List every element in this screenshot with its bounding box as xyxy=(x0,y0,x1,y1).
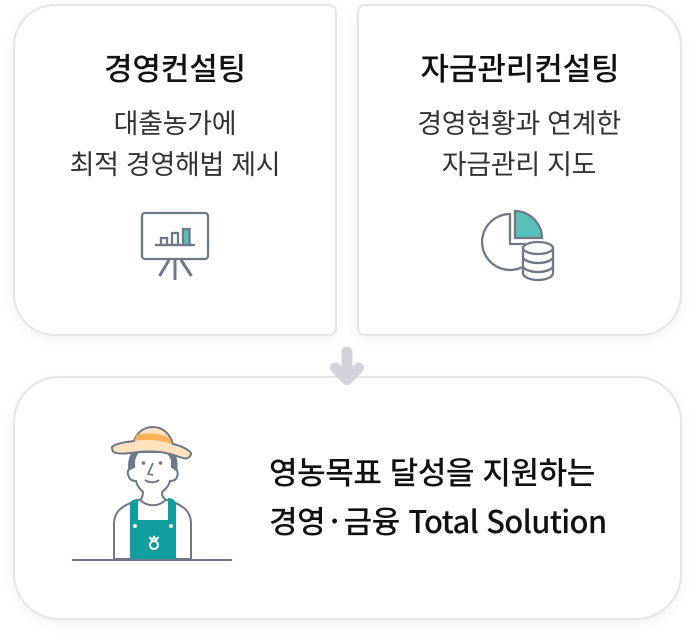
panel: fund management consulting xyxy=(357,4,682,336)
text: fund management description: 자금관리 지도 xyxy=(442,150,596,180)
text: total solution message: 경영 · 금융 Total Solution xyxy=(269,497,607,542)
panel: management consulting xyxy=(13,4,337,336)
panel: total solution xyxy=(13,376,682,620)
text: fund management description xyxy=(417,109,621,180)
neck and face xyxy=(128,452,178,505)
text: total solution message: 영농목표 달성을 지원하는 xyxy=(269,448,595,493)
heading: fund management consulting: 자금관리컨설팅 xyxy=(421,52,619,87)
overalls logo xyxy=(150,537,158,549)
heading: management consulting: 경영컨설팅 xyxy=(104,52,246,87)
ground line xyxy=(72,559,232,561)
text: management consulting description: 최적 경영해법 제시 xyxy=(70,150,280,180)
overalls xyxy=(130,498,176,560)
hat xyxy=(112,427,191,458)
text: management consulting description: 대출농가에 xyxy=(114,109,236,139)
eyes, nose and mouth xyxy=(142,461,145,465)
text: total solution message xyxy=(269,448,607,542)
text: fund management description: 경영현황과 연계한 xyxy=(417,109,621,139)
text: management consulting description xyxy=(70,109,280,180)
shirt xyxy=(114,500,191,559)
hair xyxy=(128,450,178,472)
